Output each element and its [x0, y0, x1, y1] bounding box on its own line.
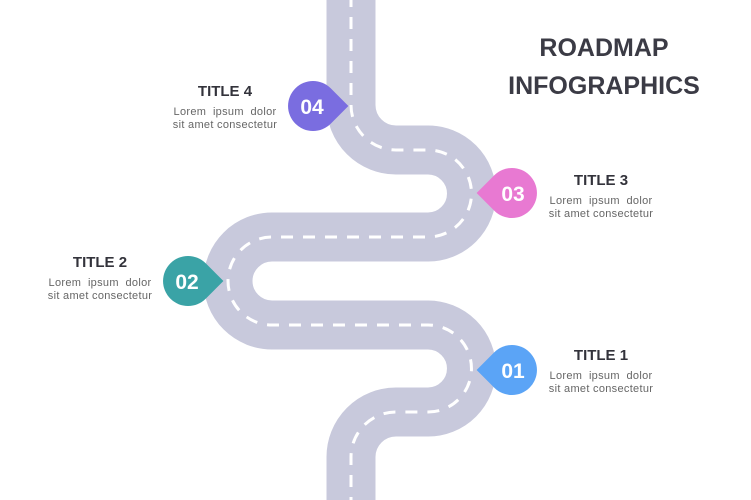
text: title 1: TITLE 1 [574, 347, 628, 364]
marker 03 [477, 168, 537, 218]
marker 04 [288, 81, 348, 131]
text: title 4: Lorem ipsum dolor [174, 106, 276, 118]
title [508, 34, 700, 100]
text: title 3: Lorem ipsum dolor [550, 195, 652, 207]
title: ROADMAP [539, 34, 669, 62]
title: INFOGRAPHICS [508, 72, 700, 100]
text: title 3: sit amet consectetur [549, 208, 653, 220]
text: title 1 [549, 347, 653, 395]
text: title 4: TITLE 4 [198, 83, 252, 100]
text: title 3: TITLE 3 [574, 172, 628, 189]
marker 02: 02 [175, 271, 199, 294]
text: title 4: sit amet consectetur [173, 119, 277, 131]
text: title 2 [48, 254, 152, 302]
marker 03: 03 [501, 183, 525, 206]
marker 04: 04 [300, 96, 324, 119]
text: title 4 [173, 83, 277, 131]
text: title 3 [549, 172, 653, 220]
text: title 1: sit amet consectetur [549, 383, 653, 395]
marker 02 [163, 256, 223, 306]
text: title 2: Lorem ipsum dolor [49, 277, 151, 289]
text: title 2: TITLE 2 [73, 254, 127, 271]
text: title 1: Lorem ipsum dolor [550, 370, 652, 382]
marker 01 [477, 345, 537, 395]
text: title 2: sit amet consectetur [48, 290, 152, 302]
marker 01: 01 [501, 360, 525, 383]
